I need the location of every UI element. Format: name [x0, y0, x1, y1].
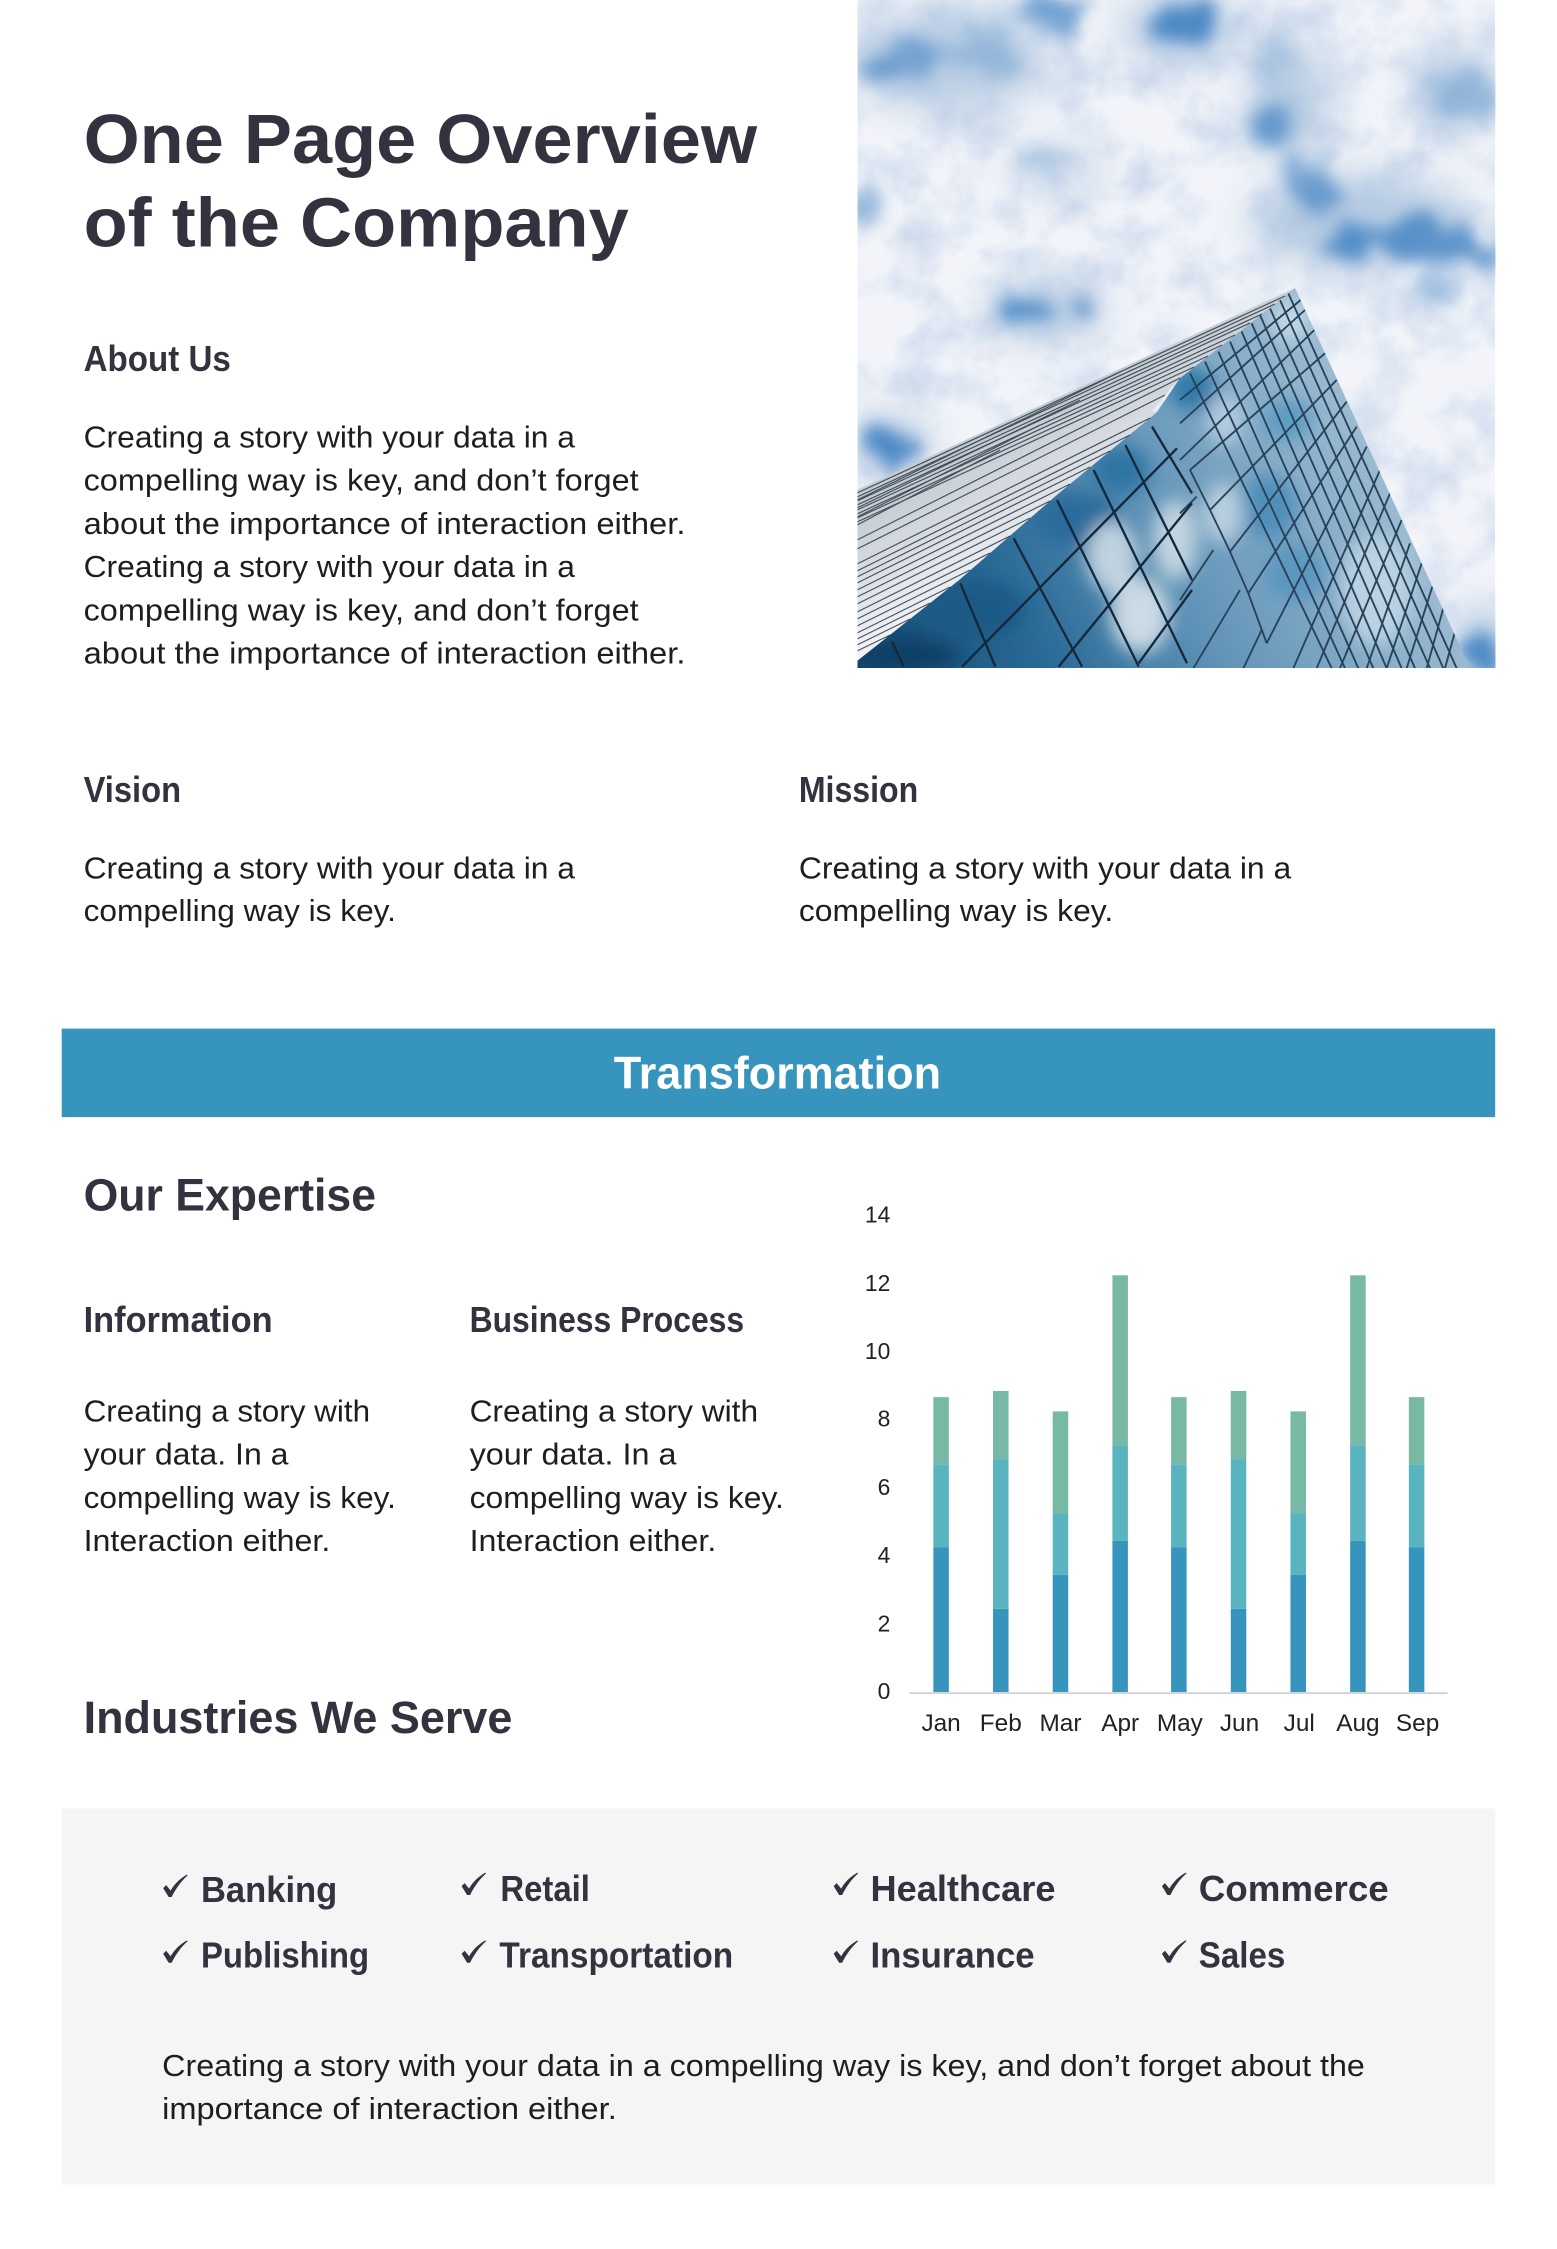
bar: Sep: [1409, 1397, 1424, 1692]
x axis labels: Jan: [921, 1710, 961, 1737]
icon: building glass face: [850, 288, 1470, 673]
bar: Aug: [1350, 1275, 1366, 1692]
y axis labels: 6: [878, 1474, 890, 1500]
title: of the Company: [84, 184, 629, 262]
text block: information: your data. In a: [84, 1436, 289, 1471]
y axis labels: 8: [878, 1406, 890, 1432]
bar: Apr: [1112, 1275, 1128, 1692]
y axis labels: 2: [878, 1610, 890, 1636]
icon: building roof: [857, 288, 1295, 661]
text block: industries note: Creating a story with your data in a compelling way is key, and don’t forget about the: [162, 2048, 1365, 2083]
industry: Retail: [462, 1869, 590, 1909]
text block: business process: Creating a story with: [470, 1394, 758, 1429]
bar: May: [1171, 1397, 1187, 1692]
text block: industries note: importance of interaction either.: [162, 2091, 617, 2126]
text block: vision: compelling way is key.: [84, 893, 396, 928]
text block: vision: Creating a story with your data in a: [84, 850, 576, 885]
panel: industries: [62, 1809, 1495, 2185]
heading: business process: Business Process: [470, 1300, 744, 1340]
banner: transformation: Transformation: [614, 1047, 941, 1098]
heading: industries we serve: Industries We Serve: [84, 1692, 512, 1743]
bar: Jan: [933, 1397, 949, 1692]
heading: our expertise: Our Expertise: [84, 1170, 376, 1221]
text block: about us: [84, 420, 685, 671]
photo: glass building against a cloudy sky: [850, 0, 1510, 675]
text block: about us: Creating a story with your data in a: [84, 549, 576, 584]
y axis labels: [865, 1202, 891, 1704]
text block: business process: your data. In a: [470, 1436, 677, 1471]
x axis labels: Aug: [1336, 1710, 1380, 1737]
text block: mission: Creating a story with your data in a: [799, 850, 1292, 885]
title: [84, 100, 758, 262]
x axis labels: May: [1157, 1710, 1204, 1737]
text block: about us: compelling way is key, and don’t forget: [84, 593, 639, 628]
y axis labels: 10: [865, 1338, 890, 1364]
x axis labels: Mar: [1039, 1710, 1081, 1737]
heading: vision: Vision: [84, 770, 181, 810]
text block: about us: about the importance of interaction either.: [84, 506, 685, 541]
text block: vision: [84, 850, 576, 928]
heading: mission: Mission: [799, 770, 918, 810]
title: One Page Overview: [84, 100, 758, 178]
text block: mission: compelling way is key.: [799, 893, 1113, 928]
text block: information: [84, 1394, 396, 1558]
left face window grid: [892, 427, 1192, 667]
x axis labels: Feb: [980, 1710, 1022, 1737]
stacked bar chart: [865, 1202, 1447, 1737]
industry: Insurance: Insurance: [870, 1936, 1035, 1976]
industry: Healthcare: Healthcare: [870, 1869, 1055, 1909]
x axis labels: Apr: [1101, 1710, 1139, 1737]
text block: information: compelling way is key.: [84, 1480, 396, 1515]
text block: about us: about the importance of interaction either.: [84, 636, 685, 671]
x axis labels: Jul: [1284, 1710, 1315, 1737]
banner: transformation: [62, 1029, 1495, 1117]
text block: mission: [799, 850, 1292, 928]
y axis labels: 0: [878, 1678, 890, 1704]
column: information: [84, 1300, 396, 1558]
heading: about us: About Us: [84, 339, 231, 379]
y axis labels: 14: [865, 1202, 891, 1228]
industry: Transportation: Transportation: [499, 1936, 733, 1976]
bar: Mar: [1053, 1411, 1068, 1692]
industry: Commerce: Commerce: [1199, 1869, 1389, 1909]
bar: Jun: [1231, 1391, 1246, 1692]
x axis labels: Sep: [1396, 1710, 1439, 1737]
bar: Feb: [993, 1391, 1009, 1692]
x axis labels: [921, 1710, 1439, 1737]
text block: about us: compelling way is key, and don’t forget: [84, 462, 639, 497]
text block: information: Creating a story with: [84, 1394, 370, 1429]
industry: Retail: Retail: [500, 1869, 590, 1909]
text block: business process: Interaction either.: [470, 1523, 716, 1558]
industry: Sales: Sales: [1199, 1936, 1285, 1976]
bar: Jul: [1290, 1411, 1306, 1692]
clouds blue gaps: [851, 0, 1500, 672]
text block: information: Interaction either.: [84, 1523, 330, 1558]
industry: Publishing: Publishing: [201, 1936, 369, 1976]
industry: Banking: Banking: [201, 1870, 337, 1910]
clouds haze: [850, 0, 1510, 675]
industry: Sales: [1162, 1936, 1285, 1976]
x axis labels: Jun: [1220, 1710, 1259, 1737]
column: business process: [470, 1300, 784, 1558]
text block: about us: Creating a story with your data in a: [84, 420, 576, 455]
text block: industries note: [162, 2048, 1365, 2126]
text block: business process: [470, 1394, 784, 1558]
text block: business process: compelling way is key.: [470, 1480, 784, 1515]
right face window grid: [1180, 293, 1457, 668]
y axis labels: 12: [865, 1270, 890, 1296]
heading: information: Information: [84, 1300, 273, 1340]
y axis labels: 4: [878, 1542, 891, 1568]
